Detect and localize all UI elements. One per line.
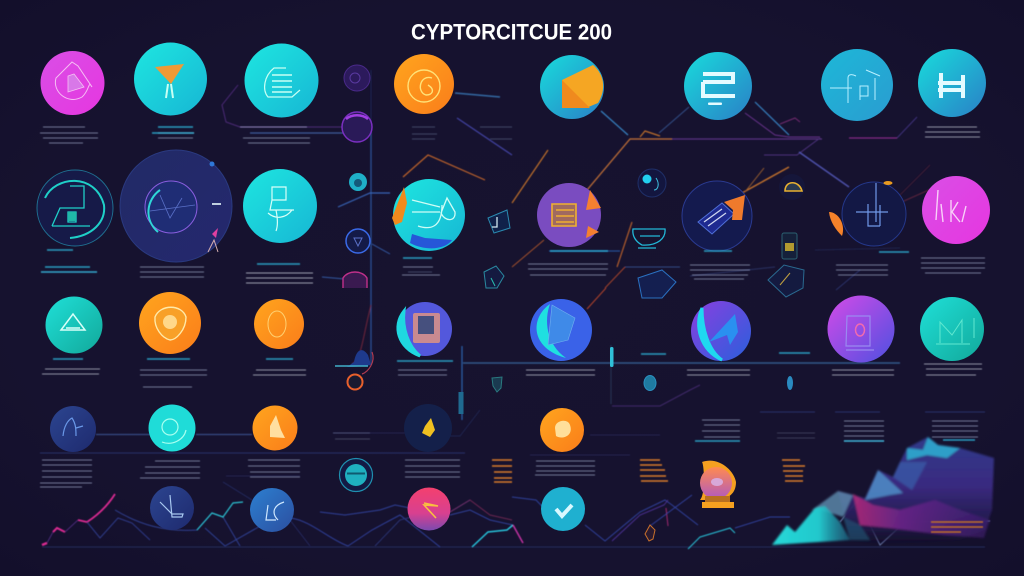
icon: teal swirl coin xyxy=(148,404,196,452)
icon: blue ring node xyxy=(346,229,370,253)
text placeholder lines: dim body copy xyxy=(41,127,512,272)
icon: teal coin M xyxy=(920,297,984,361)
chart: outlined range xyxy=(840,500,990,545)
icon: teal coin funnel xyxy=(134,42,207,116)
text placeholder lines: orange notes xyxy=(492,460,983,532)
icon: blue coin sketch xyxy=(821,49,893,121)
icon: blue bulb node xyxy=(335,350,373,374)
panel: line charts xyxy=(42,482,990,549)
icon: teal pillar xyxy=(458,392,464,414)
icon: dark ring coin tag xyxy=(682,181,752,251)
icon: hex badge right xyxy=(768,265,804,297)
icon: navy coin with chart mark xyxy=(150,486,194,530)
icon: navy coin xyxy=(50,406,96,452)
icon: teal coin sketch xyxy=(243,169,317,243)
icon: small teal bowl xyxy=(633,229,665,248)
icon: small teal node xyxy=(349,173,367,191)
icon: indigo coin arrow xyxy=(691,301,751,361)
icon: teal ring node xyxy=(340,458,372,492)
chart: left wave xyxy=(42,482,470,547)
text placeholder lines: light body copy xyxy=(40,127,985,487)
icon: orange coin xyxy=(394,54,454,114)
icon: small purple node xyxy=(344,65,370,91)
icon: outlined teal globe xyxy=(37,170,113,246)
icon: orange award globe xyxy=(700,461,736,508)
icon: purple coin with gold glyph xyxy=(537,183,601,247)
text placeholder lines: teal and blue labels xyxy=(41,127,975,441)
icon: orange coin figure xyxy=(252,406,298,450)
icon: small shield xyxy=(492,377,502,392)
icon: small orange shield xyxy=(645,525,655,541)
icon: orange ring node xyxy=(348,374,362,390)
icon: teal coin letter E xyxy=(684,52,752,120)
icon: pink coin xyxy=(40,51,104,115)
icon: hex badge left xyxy=(484,266,504,288)
icon: teal coin with orange shard xyxy=(392,179,465,251)
icon: pink rose coin xyxy=(408,488,450,530)
icon: blue coin with figure xyxy=(250,488,294,532)
icon: dark node with droplet xyxy=(638,169,666,197)
icon: blue coin document xyxy=(398,302,452,356)
icon: gold gauge node xyxy=(779,174,805,200)
icon: orange leaf xyxy=(829,212,843,236)
icon: violet coin lock xyxy=(828,296,894,362)
icon: magenta ring node xyxy=(343,272,367,288)
network connector lines xyxy=(40,70,985,547)
icon: small gold device xyxy=(782,233,797,259)
icon: teal coin triangle xyxy=(46,296,102,354)
panel: row 3 coins xyxy=(46,292,984,414)
icon: dark coin gold glyph xyxy=(404,404,452,452)
icon: orange coin blob xyxy=(540,408,584,452)
icon: small blue pin xyxy=(787,376,793,390)
panel: row 4 coins xyxy=(50,404,736,508)
icon: small tile J xyxy=(488,210,510,233)
icon: orange coin oval xyxy=(254,299,304,349)
icon: large dark sphere xyxy=(120,150,232,262)
icon: teal glowing marker xyxy=(610,347,614,367)
icon: teal coin check xyxy=(541,487,585,531)
panel: row 2 coins xyxy=(37,150,990,298)
icon: teal coin H xyxy=(918,49,986,117)
chart: mountain area xyxy=(772,437,994,545)
panel: row 1 coins xyxy=(40,42,986,142)
title: CYPTORCITCUE 200 xyxy=(411,20,612,44)
icon: blue coin teal arc xyxy=(530,299,592,361)
icon: hex badge center xyxy=(638,270,676,298)
icon: teal coin with orange polygon xyxy=(540,55,604,119)
icon: gold tag xyxy=(884,181,892,185)
icon: magenta coin xyxy=(922,176,990,244)
icon: dark ring coin grid xyxy=(842,182,906,246)
icon: teal coin document xyxy=(244,44,318,118)
icon: teal droplet node xyxy=(644,376,656,390)
chart: middle wave xyxy=(450,495,790,549)
icon: orange coin shield xyxy=(139,292,201,354)
icon: purple ring node xyxy=(342,112,372,142)
